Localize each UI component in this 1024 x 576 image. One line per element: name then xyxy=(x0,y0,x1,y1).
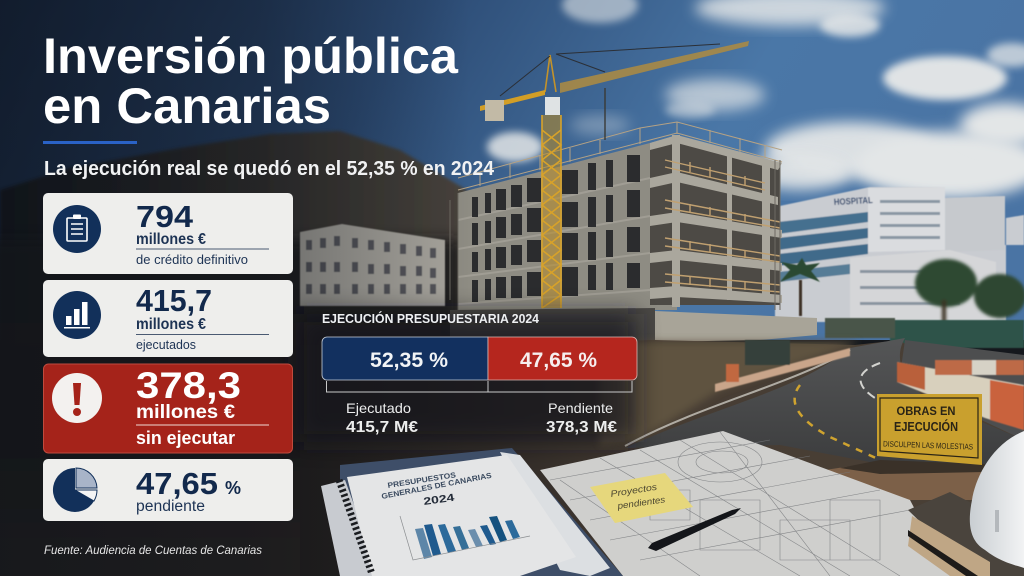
title underline xyxy=(43,141,137,144)
counter jib xyxy=(480,90,545,111)
pending legend xyxy=(546,400,617,436)
card: executed xyxy=(43,280,293,357)
scaffold xyxy=(450,160,780,310)
sticky note: Proyectos xyxy=(610,482,658,499)
hospital sign: HOSPITAL xyxy=(834,195,873,207)
spiral binding xyxy=(339,480,372,574)
crane mast xyxy=(542,115,561,308)
pending legend: Pendiente xyxy=(548,400,613,416)
dirt slope near road xyxy=(600,342,860,445)
credit value: 794 xyxy=(136,199,194,234)
hook xyxy=(604,88,606,140)
card: not executed xyxy=(44,364,292,453)
sticky note xyxy=(590,473,693,523)
tower crane xyxy=(480,41,749,308)
credit unit: millones € xyxy=(136,231,206,248)
dirt shoulder xyxy=(825,462,985,500)
sign: obras en ejecución: EJECUCIÓN xyxy=(894,419,958,434)
palm tree xyxy=(780,258,820,316)
trees xyxy=(915,259,1024,324)
executed legend: Ejecutado xyxy=(346,400,411,416)
roadside barriers far xyxy=(715,340,850,392)
building left facade xyxy=(458,135,677,310)
card: pending xyxy=(43,459,293,521)
crane cables xyxy=(500,44,720,96)
road xyxy=(625,338,1024,470)
sticky note: pendientes xyxy=(616,494,666,511)
building open floors xyxy=(650,138,780,305)
budget execution chart xyxy=(322,311,637,436)
middle ground xyxy=(300,340,1024,576)
building under construction xyxy=(458,122,782,310)
left dark overlay xyxy=(0,0,470,576)
hospital building xyxy=(775,187,1024,322)
not executed unit: millones € xyxy=(136,402,235,423)
crane jib xyxy=(560,41,749,93)
paper stack right xyxy=(500,452,610,576)
executed value: 415,7 xyxy=(136,283,212,318)
pending legend: 378,3 M€ xyxy=(546,419,617,436)
binder folder xyxy=(340,448,623,576)
credit label: de crédito definitivo xyxy=(136,253,248,267)
budget report: PRESUPUESTOS xyxy=(387,470,456,490)
chart heading: EJECUCIÓN PRESUPUESTARIA 2024 xyxy=(322,311,539,326)
sky xyxy=(0,0,1024,340)
icon: clipboard xyxy=(53,205,101,253)
icon: warning xyxy=(52,373,102,423)
road center dashes xyxy=(795,385,878,459)
budget report: GENERALES DE CANARIAS xyxy=(381,471,492,501)
executed label: ejecutados xyxy=(136,338,196,352)
not executed label: sin ejecutar xyxy=(136,428,235,448)
pending percent sign: % xyxy=(225,478,241,498)
sign: obras en ejecución: OBRAS EN xyxy=(896,404,956,418)
ground level walls xyxy=(450,308,655,345)
mountains xyxy=(0,131,500,345)
roadside barriers near xyxy=(897,360,1024,430)
upper right road xyxy=(900,340,1024,440)
pending segment: 47,65 % xyxy=(520,349,597,372)
executed legend: 415,7 M€ xyxy=(346,419,418,436)
crane apex xyxy=(545,55,556,92)
pending label: pendiente xyxy=(136,498,205,515)
icon: bar chart xyxy=(53,291,101,339)
clouds xyxy=(487,0,1024,199)
executed segment: 52,35 % xyxy=(370,349,448,372)
title xyxy=(43,27,459,134)
pending value: 47,65 xyxy=(136,466,218,501)
pen xyxy=(648,508,741,551)
sign: obras en ejecución: DISCULPEN LAS MOLESTIAS xyxy=(883,439,973,452)
title: Inversión pública xyxy=(43,27,459,84)
blueprints xyxy=(540,431,950,576)
building windows xyxy=(472,155,640,302)
pending segment xyxy=(488,337,637,380)
subtitle: La ejecución real se quedó en el 52,35 % en 2024 xyxy=(44,158,495,180)
balcony railings xyxy=(665,160,780,292)
sign: obras en ejecución xyxy=(877,394,982,465)
title: en Canarias xyxy=(43,77,331,134)
distant apartments xyxy=(300,224,445,306)
books xyxy=(908,492,1024,576)
roof railing xyxy=(458,122,782,190)
paper stack left xyxy=(321,480,380,576)
counterweight xyxy=(485,100,504,121)
source note: Fuente: Audiencia de Cuentas de Canarias xyxy=(44,545,262,557)
card: credit xyxy=(43,193,293,274)
budget report: 2024 xyxy=(423,492,455,508)
executed legend xyxy=(346,400,418,436)
budget report xyxy=(339,455,576,576)
crane cab xyxy=(545,97,560,115)
icon: pie chart xyxy=(53,468,97,512)
not executed value: 378,3 xyxy=(136,365,241,406)
road edge line xyxy=(625,350,850,446)
road right markings xyxy=(861,363,880,398)
executed segment xyxy=(322,337,488,380)
construction site fence xyxy=(825,318,1024,348)
executed unit: millones € xyxy=(136,316,206,333)
left hillside xyxy=(0,240,460,576)
report mini chart xyxy=(400,516,530,560)
floor bands xyxy=(458,178,650,304)
hard hat xyxy=(970,431,1024,568)
chart dark backdrop xyxy=(296,314,636,442)
